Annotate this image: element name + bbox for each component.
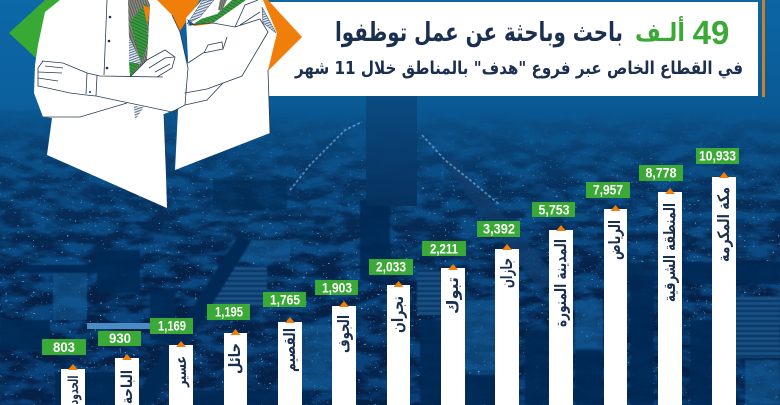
bar: Jazan 3,392: جازان: [497, 258, 516, 288]
bar: Makkah 10,933: 10,933: [699, 148, 736, 164]
garment and arm outlines: left man: [38, 0, 188, 165]
shirt buttons: [89, 16, 111, 93]
bar: Hail 1,195: 1,195: [215, 304, 243, 320]
bar chart: job seekers employed by region: [42, 148, 739, 405]
title word: thousand: ألـف: [635, 16, 685, 47]
bar: Madinah 5,753: [532, 202, 575, 405]
orange vertical stripe: [762, 0, 765, 97]
bar: Riyadh 7,957: [586, 182, 630, 405]
bar: Jazan 3,392: [477, 221, 520, 405]
bar: Tabuk 2,211: تبوك: [443, 277, 462, 314]
bar: Al Jawf 1,903: 1,903: [322, 280, 352, 296]
bar: Najran 2,033: 2,033: [376, 260, 406, 274]
bar: Hail 1,195: حائل: [225, 343, 244, 374]
orange diamond behind figures (centre): [157, 0, 200, 31]
title panel: [266, 2, 758, 96]
bar: Eastern Province 8,778: 8,778: [646, 166, 677, 180]
bar: Al Bahah 930: الباحة: [118, 370, 136, 404]
figure: left man: [34, 0, 188, 208]
bar: Najran 2,033: نجران: [388, 296, 407, 333]
bar: Qassim 1,765: [263, 292, 306, 405]
bar: Al Bahah 930: 930: [109, 331, 131, 346]
bar: Riyadh 7,957: الرياض: [605, 220, 624, 260]
bar: Asir 1,169: 1,169: [158, 318, 186, 334]
bar: Asir 1,169: [150, 318, 193, 405]
bar: Eastern Province 8,778: [639, 165, 683, 405]
bar: Hail 1,195: [207, 304, 250, 405]
bar: Makkah 10,933: [696, 148, 739, 405]
bar: Tabuk 2,211: [422, 241, 466, 405]
bar: Qassim 1,765: 1,765: [270, 292, 300, 308]
bar: Eastern Province 8,778: المنطقة الشرقية: [660, 203, 679, 302]
bar: Riyadh 7,957: 7,957: [593, 182, 623, 198]
bar: Madinah 5,753: المدينة المنورة: [551, 239, 570, 327]
figure: right man: [175, 0, 277, 170]
orange diamond right of figures: [260, 0, 302, 71]
bar: Makkah 10,933: مكة المكرمة: [714, 187, 733, 262]
bar: Al Jawf 1,903: [315, 280, 358, 405]
bar: Jazan 3,392: 3,392: [483, 222, 515, 236]
green diamond behind figures: [9, 0, 70, 70]
bar: Qassim 1,765: القصيم: [280, 328, 299, 372]
bar: Northern Borders 803: [42, 339, 86, 405]
bar: Madinah 5,753: 5,753: [538, 202, 570, 218]
bar: Northern Borders 803: 803: [53, 340, 75, 355]
bar: Al Bahah 930: [98, 331, 141, 405]
bar: Al Jawf 1,903: الجوف: [334, 315, 353, 353]
bar: Asir 1,169: عسير: [172, 356, 190, 388]
bar: Northern Borders 803: الحدود: [66, 375, 82, 405]
tie: left man: [128, 0, 150, 120]
title line: باحث وباحثة عن عمل توظفوا: [335, 18, 623, 48]
bar: Tabuk 2,211: 2,211: [430, 242, 458, 256]
bar: Najran 2,033: [369, 259, 413, 405]
title number: 49 thousand: 49: [693, 14, 729, 51]
